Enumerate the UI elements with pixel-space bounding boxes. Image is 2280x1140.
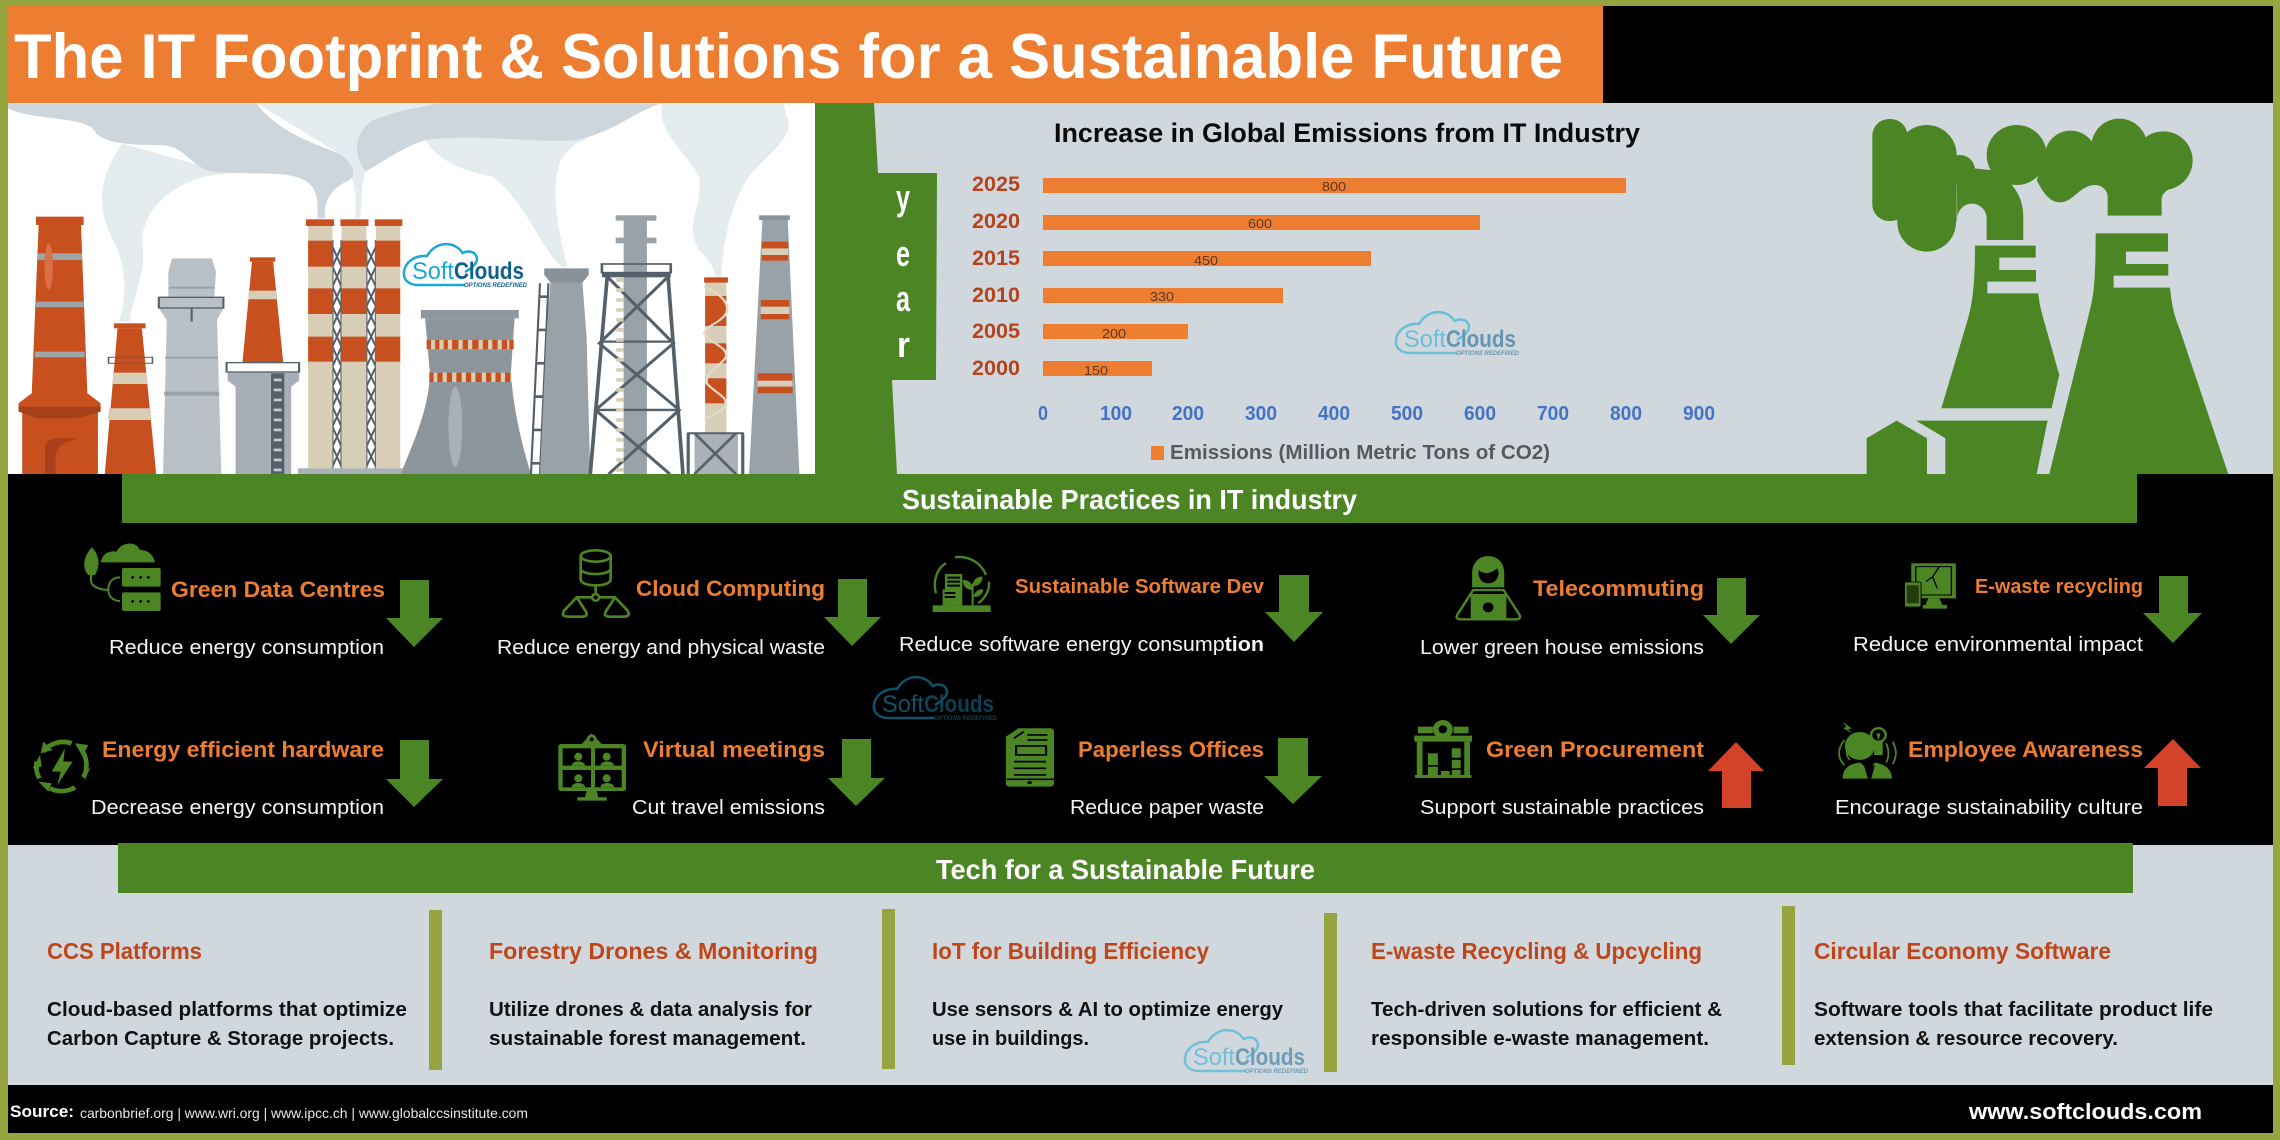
arrow: down [2143, 576, 2202, 643]
logo: SoftClouds on illustration: Soft [412, 258, 454, 285]
bar chart: emissions by year: 2015 [972, 247, 1020, 270]
practice: Virtual meetings: Cut travel emissions [632, 797, 825, 819]
practice: Telecommuting: Lower green house emissions [1420, 637, 1704, 659]
divider [429, 910, 442, 1070]
chimney 3 [159, 258, 223, 474]
dark smoke [8, 103, 662, 218]
chimney 4 [227, 257, 299, 474]
icon: cloud database [563, 550, 629, 617]
practice: Sustainable Software Dev [899, 557, 1323, 656]
practice: E-waste recycling: Reduce environmental impact [1853, 634, 2143, 656]
section header: practices [122, 474, 2137, 523]
arrow: down [824, 579, 881, 646]
arrow: down [1703, 578, 1760, 644]
divider [1782, 906, 1795, 1065]
card: Circular Economy Software: Circular Economy Software [1814, 938, 2111, 964]
logo: SoftClouds chart watermark: Clouds [1446, 326, 1516, 353]
bar chart: emissions by year: 2025 [972, 173, 1020, 196]
bar chart: emissions by year: 2020 [972, 210, 1020, 233]
chimney 2 [105, 323, 156, 474]
logo: SoftClouds panel watermark: OPTIONS REDEFINED [1245, 1068, 1308, 1075]
icon: data centre [84, 544, 161, 611]
bar chart: emissions by year [972, 173, 1715, 425]
panel: chart background [815, 103, 2273, 474]
bar chart: emissions by year: 100 [1100, 403, 1132, 425]
arrow: up [1708, 742, 1764, 808]
lattice tower [590, 215, 683, 474]
logo: SoftClouds chart watermark: OPTIONS REDEFINED [1456, 350, 1519, 357]
icon: sustainable building [933, 557, 991, 612]
bar chart: emissions by year: 200 [1172, 403, 1204, 425]
year axis ribbon [815, 103, 937, 474]
card: CCS Platforms [47, 938, 407, 1050]
card: Circular Economy Software: extension & resource recovery. [1814, 1027, 2118, 1050]
bar chart: emissions by year: 900 [1683, 403, 1715, 425]
cooling tower [401, 310, 531, 474]
thin striped stack [687, 277, 744, 474]
year axis ribbon: y [896, 177, 910, 218]
card: E-waste Recycling and Upcycling: Tech-driven solutions for efficient & [1371, 998, 1722, 1021]
chart legend: Emissions (Million Metric Tons of CO2) [1170, 442, 1550, 464]
icon: employee with idea [1839, 722, 1896, 779]
arrow: down [1264, 738, 1322, 804]
card: E-waste Recycling and Upcycling [1371, 938, 1722, 1050]
card: Circular Economy Software: Software tools that facilitate product life [1814, 998, 2213, 1021]
bar chart: emissions by year: 2005 [972, 320, 1020, 343]
logo: SoftClouds dark watermark: Soft [882, 691, 924, 718]
bar chart: emissions by year: 800 [1610, 403, 1642, 425]
practice: Green Procurement: Support sustainable practices [1420, 797, 1704, 819]
practice: Green Data Centres [84, 544, 443, 659]
bar chart: emissions by year: 200 [1102, 326, 1126, 341]
card: CCS Platforms: Carbon Capture & Storage projects. [47, 1027, 394, 1050]
bar chart: emissions by year: 2010 [972, 284, 1020, 307]
arrow: down [828, 739, 885, 806]
practice: Green Procurement: Green Procurement [1486, 737, 1705, 762]
practice: Paperless Offices: Paperless Offices [1078, 737, 1264, 762]
arrow: down [386, 740, 443, 807]
chart heading: Increase in Global Emissions from IT Industry [1054, 118, 1640, 148]
illustration: factory chimneys and smoke [8, 103, 815, 474]
bar chart: emissions by year: 330 [1150, 289, 1174, 304]
bar chart: emissions by year: 700 [1537, 403, 1569, 425]
logo: SoftClouds on illustration [404, 244, 527, 289]
practice: E-waste recycling: E-waste recycling [1975, 576, 2143, 598]
section header: tech: Tech for a Sustainable Future [936, 854, 1315, 885]
practice: Sustainable Software Dev: Sustainable Software Dev [1015, 576, 1265, 598]
logo: SoftClouds dark watermark: OPTIONS REDEFINED [934, 715, 997, 722]
card: E-waste Recycling and Upcycling: E-waste Recycling & Upcycling [1371, 938, 1702, 964]
practice: Employee Awareness: Employee Awareness [1908, 737, 2143, 762]
section header: tech [118, 843, 2133, 893]
practice: Paperless Offices [1006, 728, 1322, 819]
arrow: up [2144, 739, 2201, 806]
practice: Virtual meetings [558, 733, 885, 819]
icon: paperless tablet [1006, 728, 1054, 787]
bar chart: emissions by year: 800 [1322, 179, 1346, 194]
footer: website: www.softclouds.com [1968, 1099, 2202, 1124]
card: IoT for Building Efficiency [932, 938, 1284, 1050]
icon: energy cycle [33, 742, 91, 792]
grey stack with ladder [531, 268, 590, 474]
practice: Green Procurement [1414, 720, 1764, 819]
icon: remote worker [1457, 556, 1520, 619]
practice: Energy efficient hardware: Decrease energy consumption [91, 797, 384, 819]
practice: Green Data Centres: Green Data Centres [171, 577, 385, 602]
logo: SoftClouds on illustration: Clouds [454, 258, 524, 285]
light smoke [102, 103, 789, 322]
card: E-waste Recycling and Upcycling: responsible e-waste management. [1371, 1027, 1709, 1050]
logo: SoftClouds dark watermark [874, 677, 997, 722]
practice: Energy efficient hardware [33, 737, 443, 819]
practice: Employee Awareness [1835, 722, 2201, 819]
practice: Telecommuting [1420, 556, 1760, 659]
card: CCS Platforms: Cloud-based platforms that optimize [47, 998, 407, 1021]
card: IoT for Building Efficiency: use in buildings. [932, 1027, 1089, 1050]
footer: source: carbonbrief.org | www.wri.org | www.ipcc.ch | www.globalccsinstitute.com [80, 1105, 528, 1121]
practice: Green Data Centres: Reduce energy consumption [109, 637, 384, 659]
bar chart: emissions by year: 300 [1245, 403, 1277, 425]
icon: green factory [1867, 119, 2228, 474]
logo: SoftClouds chart watermark [1396, 312, 1519, 357]
practice: Employee Awareness: Encourage sustainability culture [1835, 797, 2143, 819]
card: Forestry Drones and Monitoring: sustainable forest management. [489, 1027, 806, 1050]
logo: SoftClouds dark watermark: Clouds [924, 691, 994, 718]
year axis ribbon: e [896, 233, 910, 274]
bar chart: emissions by year: 600 [1464, 403, 1496, 425]
bar chart: emissions by year: 2000 [972, 357, 1020, 380]
logo: SoftClouds panel watermark: Clouds [1235, 1044, 1305, 1071]
practice: Cloud Computing: Reduce energy and physical waste [497, 637, 825, 659]
arrow: down [1265, 575, 1323, 642]
triple striped stacks [298, 219, 410, 474]
panel: tech for a sustainable future [8, 845, 2273, 1085]
chimney 1 [19, 217, 101, 474]
card: Forestry Drones and Monitoring: Utilize drones & data analysis for [489, 998, 812, 1021]
title banner [8, 6, 1603, 103]
card: IoT for Building Efficiency: IoT for Building Efficiency [932, 938, 1209, 964]
bar chart: emissions by year: 0 [1038, 403, 1048, 425]
practice: Telecommuting: Telecommuting [1533, 576, 1704, 601]
bar chart: emissions by year: 500 [1391, 403, 1423, 425]
practice: E-waste recycling [1853, 563, 2202, 656]
section header: practices: Sustainable Practices in IT industry [902, 484, 1358, 515]
icon: procurement warehouse [1414, 720, 1472, 778]
bar chart: emissions by year: 150 [1084, 363, 1108, 378]
practice: Cloud Computing: Cloud Computing [636, 576, 825, 601]
right grey chimney [749, 215, 799, 474]
divider [1324, 913, 1337, 1072]
divider [882, 909, 895, 1069]
bar chart: emissions by year: 400 [1318, 403, 1350, 425]
logo: SoftClouds on illustration: OPTIONS REDEFINED [464, 282, 527, 289]
practice: Sustainable Software Dev: Reduce software energy consump tion [899, 634, 1264, 656]
arrow: down [386, 580, 443, 647]
year axis ribbon: r [897, 324, 910, 365]
practice: Energy efficient hardware: Energy efficient hardware [102, 737, 384, 762]
footer: source: Source: [10, 1103, 74, 1121]
bar chart: emissions by year: 600 [1248, 216, 1272, 231]
icon: video conference [558, 733, 626, 801]
practice: Virtual meetings: Virtual meetings [643, 737, 825, 762]
logo: SoftClouds chart watermark: Soft [1404, 326, 1446, 353]
card: Forestry Drones and Monitoring: Forestry Drones & Monitoring [489, 938, 818, 964]
title: The IT Footprint & Solutions for a Sustainable Future [14, 22, 1563, 92]
logo: SoftClouds panel watermark: Soft [1193, 1044, 1235, 1071]
practice: Cloud Computing [497, 550, 881, 659]
practice: Paperless Offices: Reduce paper waste [1070, 797, 1264, 819]
logo: SoftClouds panel watermark [1185, 1030, 1308, 1075]
card: CCS Platforms: CCS Platforms [47, 938, 202, 964]
card: Forestry Drones and Monitoring [489, 938, 818, 1050]
icon: broken monitor and phone [1905, 563, 1956, 609]
year axis ribbon: a [896, 278, 911, 319]
bar chart: emissions by year: 450 [1194, 253, 1218, 268]
card: IoT for Building Efficiency: Use sensors & AI to optimize energy [932, 998, 1284, 1021]
card: Circular Economy Software [1814, 938, 2213, 1050]
